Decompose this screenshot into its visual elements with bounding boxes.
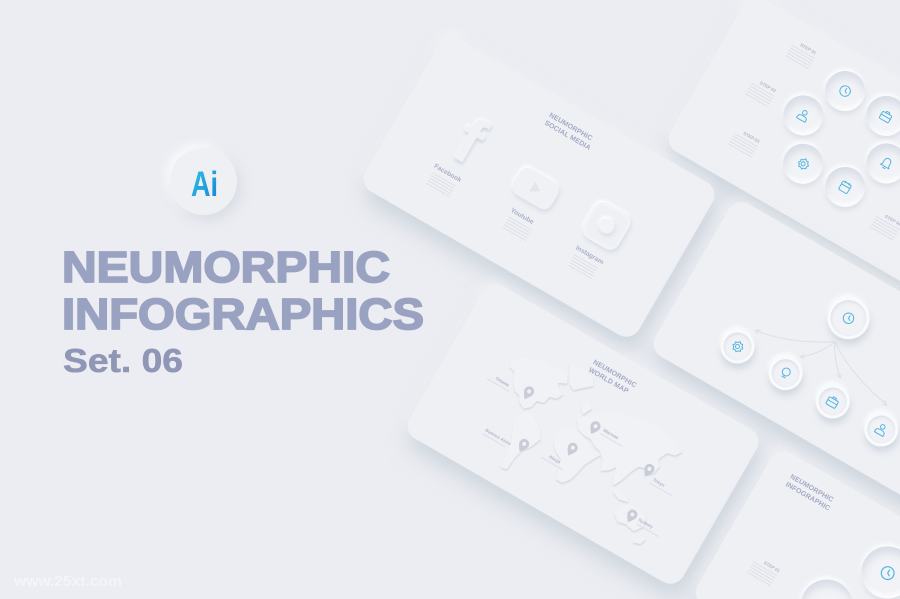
icon: person node <box>858 406 900 453</box>
icon: person button <box>776 88 831 143</box>
panel: world map card <box>402 279 764 589</box>
panel: bottom right infographic card <box>690 446 900 599</box>
Warsaw description line <box>600 433 623 447</box>
step 02 label: STEP 02 <box>759 80 777 94</box>
play triangle <box>530 182 540 192</box>
Facebook label: Facebook <box>433 163 462 184</box>
subheading: Set. 06 <box>63 342 183 379</box>
Instagram text lines <box>567 254 598 281</box>
Tokyo description line <box>649 482 672 496</box>
step 01 text lines <box>746 561 777 588</box>
Ai text: Ai <box>191 165 218 204</box>
step 01 label: STEP 01 <box>799 42 817 56</box>
Buenos Aires description line <box>482 433 505 447</box>
icon: facebook embossed f: f <box>442 103 498 178</box>
map label: Sydney: Sydney <box>638 517 654 530</box>
icon: youtube embossed button <box>509 165 562 213</box>
card heading: WORLD MAP <box>587 366 630 395</box>
icon: clock main node <box>820 290 877 347</box>
step 04 text lines <box>869 216 900 242</box>
Youtube label: Youtube <box>509 207 535 226</box>
card heading: NEUMORPHIC <box>789 474 834 504</box>
instagram lens <box>596 216 617 236</box>
Abuja description line <box>541 457 564 470</box>
step 03 text lines <box>727 133 758 160</box>
icon: gear node <box>714 323 761 370</box>
heading line 1: NEUMORPHIC <box>62 243 390 292</box>
step 02 text lines <box>744 83 775 109</box>
icon: bulb node <box>762 350 809 396</box>
arrows from clock to four circles <box>755 330 888 406</box>
map label: Buenos Aires: Buenos Aires <box>484 428 512 446</box>
heading line 2: INFOGRAPHICS <box>62 290 424 339</box>
panel: flow diagram card <box>648 197 900 507</box>
chart: embossed world map <box>501 368 682 546</box>
second step button <box>791 570 862 599</box>
icon: bell button <box>859 136 900 191</box>
map pins <box>493 382 668 525</box>
map label: Tokyo: Tokyo <box>652 477 666 488</box>
Sydney description line <box>636 523 659 537</box>
icon: briefcase button <box>859 89 900 143</box>
step 01 label: STEP 01 <box>763 560 781 573</box>
icon: clock button <box>818 64 872 118</box>
icon: clock button <box>852 537 900 599</box>
map label: Ottawa: Ottawa <box>495 376 510 388</box>
icon: gear button <box>776 136 830 191</box>
step 01 text lines <box>784 45 815 71</box>
map label: Abuja: Abuja <box>548 454 561 464</box>
card heading: NEUMORPHIC <box>548 112 593 142</box>
Ottawa description line <box>487 378 510 392</box>
Facebook text lines <box>425 172 456 199</box>
Youtube text lines <box>501 216 532 243</box>
panel: top right step infographic card <box>663 0 900 302</box>
badge: Ai <box>170 148 237 215</box>
card heading: INFOGRAPHIC <box>784 481 831 512</box>
icon: briefcase node <box>810 378 856 425</box>
map label: Warsaw: Warsaw <box>602 427 619 440</box>
icon: calendar button <box>818 160 873 214</box>
step 03 label: STEP 03 <box>742 131 760 144</box>
icon: instagram embossed outline <box>579 199 634 253</box>
Instagram label: Instagram <box>574 245 605 266</box>
panel: social media card <box>358 32 720 342</box>
card heading: SOCIAL MEDIA <box>543 119 592 151</box>
watermark: www.25xt.com <box>13 573 122 590</box>
card heading: NEUMORPHIC <box>592 359 637 389</box>
